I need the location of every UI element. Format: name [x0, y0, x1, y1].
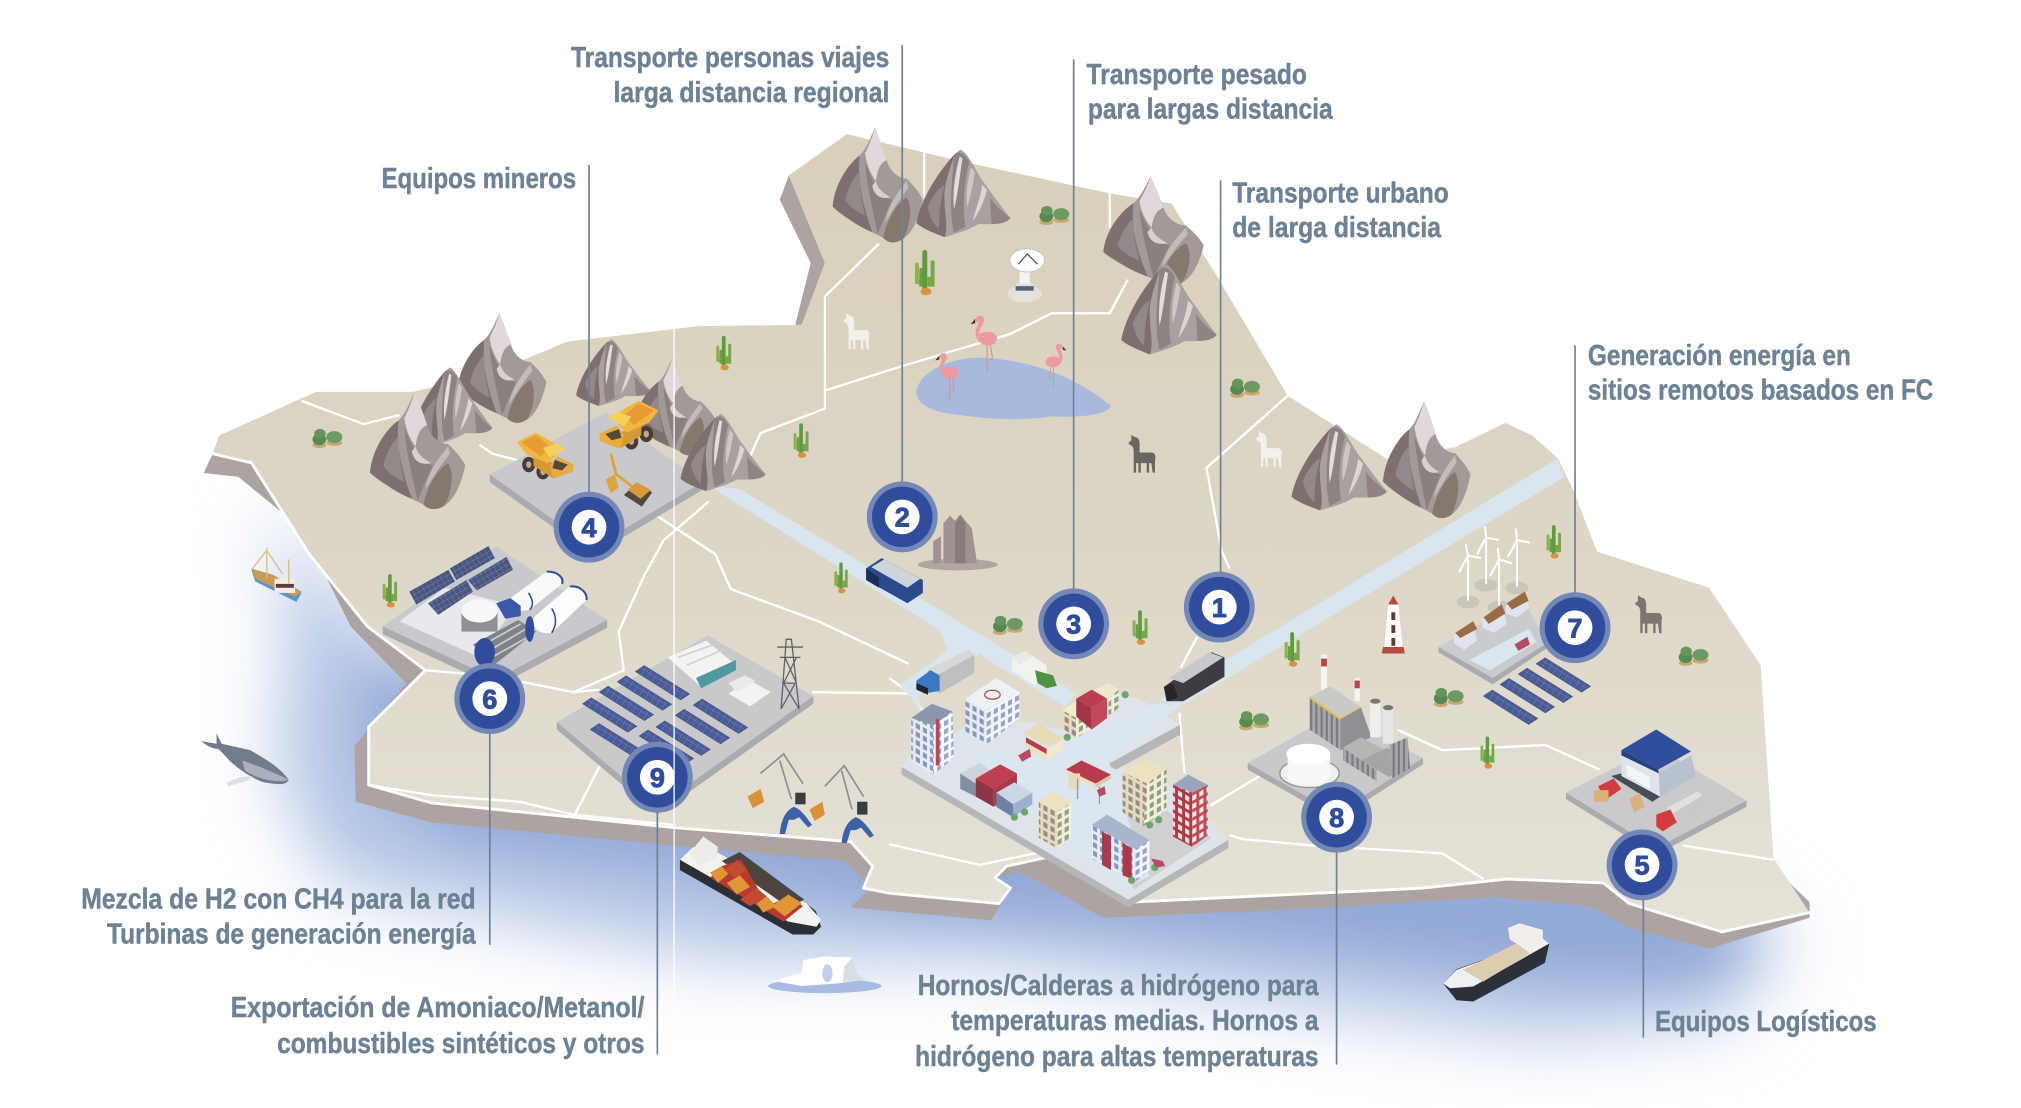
icon: container ship: [680, 837, 821, 934]
street: [951, 702, 1178, 889]
icon: tanker ship: [1443, 923, 1549, 1002]
gas station: [1066, 760, 1111, 804]
large blue building: [1092, 815, 1150, 882]
label: long distance passenger transport: [571, 42, 889, 109]
marker 9: [622, 742, 693, 813]
panel: logistics depot: [1566, 730, 1746, 855]
label: heavy transport: para largas distancia: [1088, 94, 1333, 126]
solar rows: [583, 666, 748, 764]
icon: bus on highway: [866, 558, 923, 603]
warehouse: [668, 641, 736, 688]
panel: solar farm: [557, 635, 813, 815]
marker 9: 9: [650, 763, 665, 793]
icon: llamas: [844, 313, 1662, 633]
icon: flamingos: [935, 316, 1066, 402]
marker 6: [454, 663, 525, 734]
reactor: [461, 598, 521, 632]
label: logistics equipment: Equipos Logísticos: [1655, 1006, 1877, 1038]
icon: fishing boat: [251, 548, 302, 602]
label: exports: Exportación de Amoniaco/Metanol/: [231, 992, 645, 1024]
icon: cacti: [383, 250, 1561, 769]
marker 6: 6: [482, 684, 497, 714]
icon: lorry blue: [916, 650, 974, 695]
panel: mining site: [490, 339, 766, 556]
marker 7: [1540, 592, 1610, 663]
icon: lighthouse: [1382, 596, 1405, 654]
marker 3: [1038, 588, 1109, 659]
icon: dump truck left: [517, 433, 574, 479]
label: furnaces and boilers: hidrógeno para altas temperaturas: [915, 1041, 1319, 1073]
label: furnaces and boilers: Hornos/Calderas a hidrógeno para: [918, 970, 1319, 1002]
crane right: [809, 766, 874, 843]
cream and red buildings: [1062, 683, 1119, 739]
white rule artefact: [673, 329, 675, 1018]
city base: [902, 690, 1228, 900]
marker 8: [1301, 782, 1372, 853]
mountains east: [1291, 401, 1471, 518]
marker 7: 7: [1568, 613, 1583, 643]
icon: garbage truck: [1012, 651, 1057, 688]
label: urban transport: Transporte urbano: [1232, 177, 1449, 209]
mountains west: [370, 313, 546, 509]
tall office: [911, 704, 954, 775]
label: exports: [231, 992, 645, 1060]
red truck: [1656, 791, 1704, 831]
icon: dump truck right: [599, 401, 659, 449]
marker 1: [1184, 572, 1255, 643]
label: remote power generation: sitios remotos basados en FC: [1588, 375, 1933, 407]
solar panels: [409, 546, 513, 615]
mountains north: [833, 128, 1217, 354]
marker 2: [867, 481, 938, 552]
panel: industrial plant: [1248, 655, 1423, 820]
label: furnaces and boilers: [915, 970, 1319, 1073]
label: exports: combustibles sintéticos y otros: [277, 1028, 644, 1060]
land: [213, 134, 1810, 932]
low units: [1343, 737, 1410, 781]
label: remote power generation: Generación energía en: [1588, 340, 1851, 372]
icon: rock formation: [918, 514, 998, 570]
red tower: [1173, 775, 1208, 847]
marker 1: 1: [1212, 593, 1227, 623]
label: long distance passenger transport: Transporte personas viajes: [571, 42, 889, 74]
storage tank: [1280, 744, 1339, 788]
marker 8: 8: [1329, 803, 1344, 833]
icon: satellite dish: [1007, 249, 1045, 302]
mountains at mine: [576, 339, 766, 491]
cream tower: [1123, 759, 1166, 826]
shop: [1023, 723, 1063, 760]
forklift and boxes: [1594, 779, 1645, 812]
icon: bushes: [312, 206, 1709, 730]
transport corridors: [705, 459, 1565, 710]
marker 2: 2: [895, 503, 910, 533]
cars: [1018, 749, 1165, 867]
icon: iceberg: [768, 956, 882, 993]
panel: city: [902, 678, 1228, 907]
icon: port cranes: [748, 754, 874, 843]
label: mining equipment: Equipos mineros: [382, 163, 576, 195]
panel: hydrogen plant: [383, 546, 607, 687]
marker 4: 4: [582, 513, 597, 543]
leader lines: [490, 45, 1643, 1065]
marker 5: [1607, 829, 1678, 900]
panel: wind and houses site: [1438, 526, 1591, 724]
trees: [1011, 691, 1162, 884]
icon: whale: [201, 733, 289, 786]
label: heavy transport: Transporte pesado: [1087, 59, 1307, 91]
wind turbines: [1456, 526, 1530, 614]
crane left: [748, 754, 812, 834]
low red block: [960, 763, 1032, 817]
marker 3: 3: [1066, 610, 1081, 640]
icon: excavator: [606, 454, 652, 507]
mid cream building: [1039, 791, 1071, 848]
boiler building: [1310, 686, 1371, 750]
car: [1514, 637, 1530, 651]
icon: electric coach: [1164, 652, 1224, 701]
road network: [213, 150, 1810, 932]
label: furnaces and boilers: temperaturas medias. Hornos a: [951, 1005, 1319, 1037]
label: gas grid blending: Mezcla de H2 con CH4 para la red: [81, 884, 476, 916]
solar rows: [1484, 658, 1591, 724]
label: heavy transport: [1087, 59, 1333, 126]
label: remote power generation: [1588, 340, 1933, 407]
houses: [1454, 592, 1529, 650]
hospital: [965, 678, 1020, 745]
warehouse: [1611, 730, 1696, 802]
label: gas grid blending: [81, 884, 476, 951]
heat exchanger: [473, 616, 536, 666]
marker 4: [554, 492, 624, 563]
label: long distance passenger transport: larga distancia regional: [614, 77, 889, 109]
marker 5: 5: [1635, 851, 1650, 881]
label: urban transport: [1232, 177, 1449, 244]
label: urban transport: de larga distancia: [1232, 212, 1441, 244]
coastal cliffs: [204, 175, 1810, 949]
transformers: [728, 675, 771, 706]
hydrogen tanks: [510, 572, 587, 633]
chimneys: [1321, 655, 1360, 701]
ocean: [264, 503, 1792, 1038]
cooling columns: [1370, 699, 1393, 744]
lake with flamingos: [916, 316, 1111, 419]
pylon: [777, 639, 803, 709]
label: gas grid blending: Turbinas de generación energía: [107, 919, 476, 951]
